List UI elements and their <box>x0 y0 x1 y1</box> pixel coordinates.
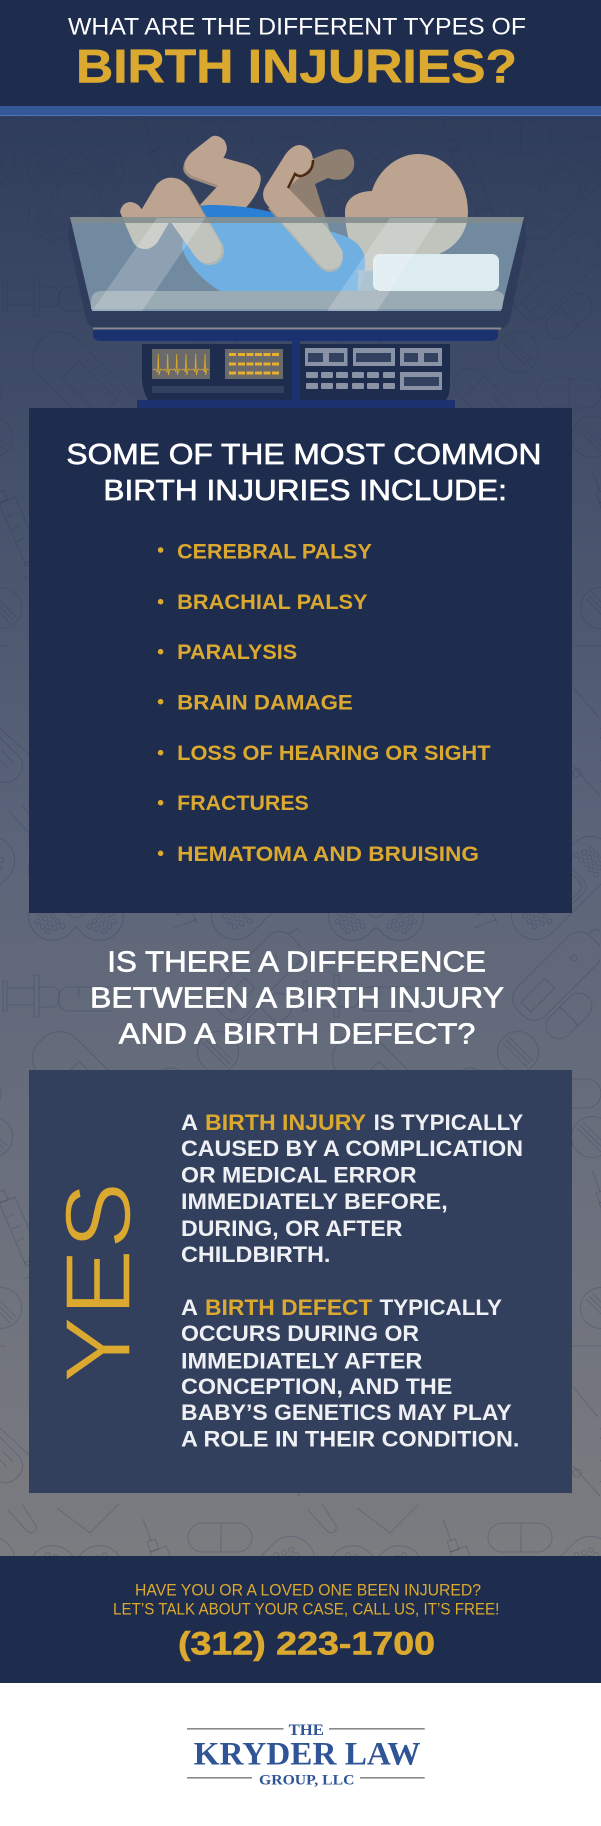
birth injury definition: CAUSED BY A COMPLICATION <box>181 1136 523 1161</box>
background: medical pattern <box>0 116 601 1556</box>
injury list: HEMATOMA AND BRUISING <box>177 843 479 866</box>
birth defect definition: CONCEPTION, AND THE <box>181 1374 452 1399</box>
title <box>68 14 526 94</box>
birth injury definition: CHILDBIRTH. <box>181 1242 330 1267</box>
birth injury definition <box>181 1110 524 1267</box>
panel: common birth injuries <box>29 408 572 913</box>
question heading: AND A BIRTH DEFECT? <box>119 1019 475 1051</box>
pillow <box>373 254 499 291</box>
call to action band <box>0 1556 601 1683</box>
monitor console <box>137 341 455 411</box>
call to action text <box>113 1581 499 1619</box>
pillow shadow <box>358 270 376 291</box>
title: WHAT ARE THE DIFFERENT TYPES OF <box>68 14 526 41</box>
panel: birth injury vs birth defect <box>29 1070 572 1493</box>
question heading: IS THERE A DIFFERENCE <box>107 947 486 979</box>
injury list: FRACTURES <box>177 792 309 815</box>
question heading: BETWEEN A BIRTH INJURY <box>90 983 504 1015</box>
birth injury definition: IMMEDIATELY BEFORE, <box>181 1189 448 1214</box>
injury list: PARALYSIS <box>177 641 297 664</box>
panel heading <box>66 439 541 507</box>
illustration: baby in incubator <box>68 136 527 411</box>
birth defect definition: BABY’S GENETICS MAY PLAY <box>181 1400 512 1425</box>
birth injury definition: DURING, OR AFTER <box>181 1216 403 1241</box>
birth injury definition: IS TYPICALLY <box>374 1110 524 1135</box>
birth defect definition: BIRTH DEFECT <box>205 1295 373 1320</box>
readout screen <box>225 349 283 379</box>
logo: The Kryder Law Group: THE <box>289 1722 324 1739</box>
injury list: BRACHIAL PALSY <box>177 591 368 614</box>
glass tray <box>70 217 524 311</box>
call to action text: LET’S TALK ABOUT YOUR CASE, CALL US, IT’S FREE! <box>113 1600 499 1619</box>
logo: The Kryder Law Group <box>187 1722 425 1788</box>
light reflections <box>92 218 438 311</box>
mattress <box>91 291 504 309</box>
control buttons <box>305 348 442 390</box>
YES label: YES <box>46 1182 150 1383</box>
injury list <box>158 540 491 866</box>
elbow crease <box>288 160 313 188</box>
upper leg <box>183 136 261 210</box>
birth defect definition: TYPICALLY <box>380 1295 502 1320</box>
head <box>345 154 468 272</box>
birth injury definition: A <box>181 1110 198 1135</box>
birth defect definition <box>181 1295 519 1452</box>
scale platform <box>93 328 501 341</box>
injury list: BRAIN DAMAGE <box>177 691 353 714</box>
birth defect definition: IMMEDIATELY AFTER <box>181 1348 423 1373</box>
injury list: CEREBRAL PALSY <box>177 540 372 563</box>
birth defect definition: OCCURS DURING OR <box>181 1321 419 1346</box>
onesie <box>182 205 365 292</box>
baby <box>120 136 468 292</box>
header band <box>0 0 601 116</box>
arm behind <box>285 149 354 232</box>
title: BIRTH INJURIES? <box>76 41 517 94</box>
logo: The Kryder Law Group: KRYDER LAW <box>194 1736 420 1772</box>
panel heading: SOME OF THE MOST COMMON <box>66 439 541 471</box>
logo: The Kryder Law Group: GROUP, LLC <box>259 1772 354 1788</box>
incubator shell <box>68 217 527 328</box>
birth injury definition: BIRTH INJURY <box>205 1110 366 1135</box>
lower leg <box>120 178 224 265</box>
front arm <box>263 145 343 272</box>
birth defect definition: A <box>181 1295 198 1320</box>
call to action text: HAVE YOU OR A LOVED ONE BEEN INJURED? <box>135 1581 481 1600</box>
birth injury definition: OR MEDICAL ERROR <box>181 1163 417 1188</box>
ECG screen <box>152 349 210 379</box>
phone number: (312) 223-1700 <box>178 1625 435 1661</box>
birth defect definition: A ROLE IN THEIR CONDITION. <box>181 1427 519 1452</box>
panel heading: BIRTH INJURIES INCLUDE: <box>103 475 507 507</box>
injury list: LOSS OF HEARING OR SIGHT <box>177 742 491 765</box>
question heading <box>90 947 504 1051</box>
glass rim <box>70 217 524 223</box>
